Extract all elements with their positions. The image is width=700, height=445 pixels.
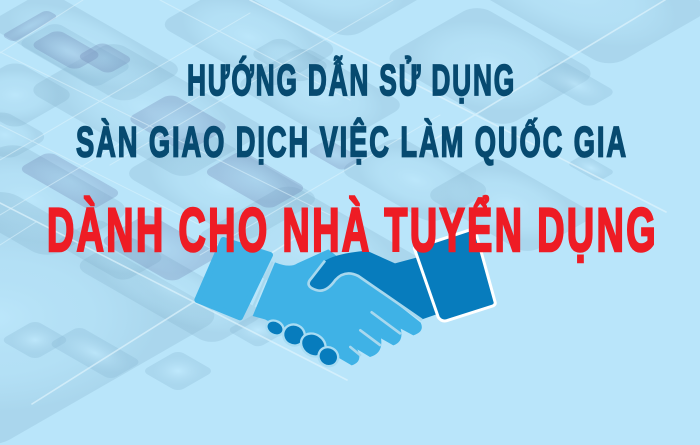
dark fingers	[264, 318, 342, 370]
finger separators	[350, 312, 400, 355]
dark blue hand	[309, 251, 439, 319]
right cuff	[414, 228, 495, 321]
icon: handshake	[197, 228, 495, 370]
thumb outline	[309, 261, 422, 320]
left sleeve gap	[249, 262, 273, 316]
light blue hand	[253, 249, 422, 365]
left cuff	[197, 240, 270, 317]
